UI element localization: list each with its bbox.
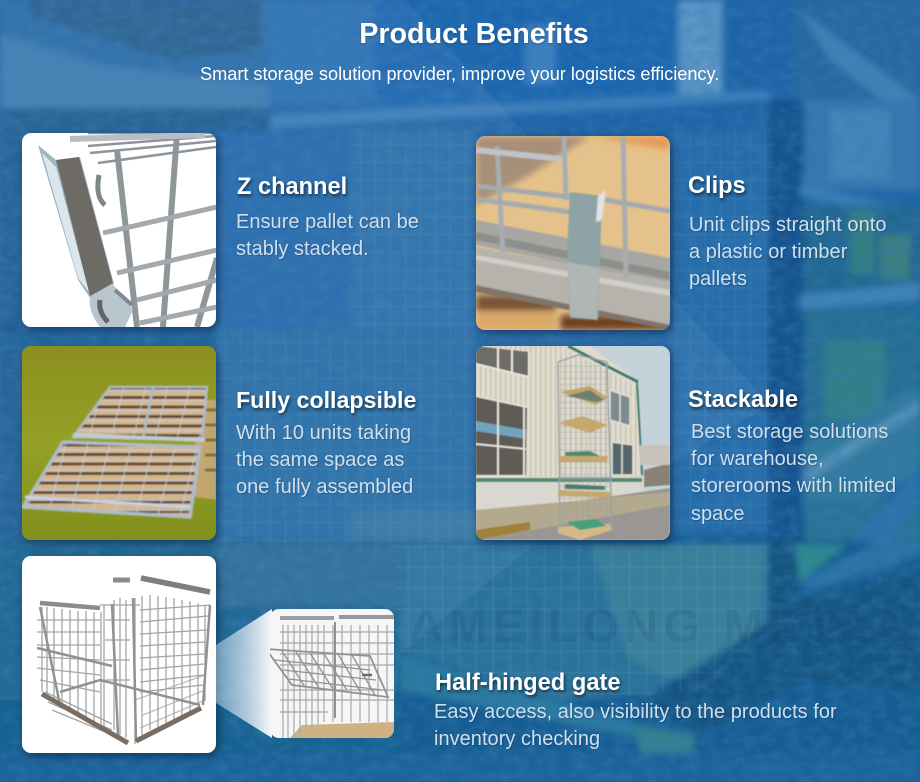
watermark: AMEILONG METAL: [409, 599, 909, 652]
panel: Z channel photo: [22, 133, 216, 327]
heading: Half-hinged gate: Half-hinged gate: [435, 670, 621, 696]
text: Fully collapsible: the same space as: [236, 449, 404, 471]
text: Stackable: storerooms with limited: [691, 475, 896, 497]
text: Clips: [689, 214, 887, 290]
text: Fully collapsible: [236, 422, 413, 498]
title: Product Benefits: [359, 18, 589, 50]
text: Stackable: [691, 421, 896, 525]
text: Z channel: Ensure pallet can be: [236, 211, 419, 233]
panel: gate detail inset: [270, 609, 394, 738]
panel: Clips photo: [476, 136, 670, 330]
text: Fully collapsible: With 10 units taking: [236, 422, 411, 444]
text: Stackable: for warehouse,: [691, 448, 824, 470]
heading: Z channel: Z channel: [237, 174, 347, 200]
text: Z channel: stably stacked.: [236, 238, 369, 260]
text: Stackable: space: [691, 503, 745, 525]
panel: Fully collapsible photo: [22, 346, 216, 540]
heading: Fully collapsible: Fully collapsible: [236, 387, 416, 413]
text: Stackable: Best storage solutions: [691, 421, 888, 443]
text: Half-hinged gate: inventory checking: [434, 728, 600, 750]
text: Half-hinged gate: Easy access, also visibility to the products for: [434, 701, 837, 723]
text: Clips: Unit clips straight onto: [689, 214, 886, 236]
subtitle: Smart storage solution provider, improve your logistics efficiency.: [200, 64, 719, 84]
panel: half-hinged gate photo: [22, 556, 216, 753]
text: Clips: pallets: [689, 268, 747, 290]
text: Z channel: [236, 211, 419, 260]
text: Half-hinged gate: [434, 701, 838, 750]
heading: Stackable: Stackable: [688, 387, 798, 413]
text: Fully collapsible: one fully assembled: [236, 476, 413, 498]
panel: Stackable photo: [476, 346, 670, 540]
heading: Clips: Clips: [688, 173, 746, 199]
text: Clips: a plastic or timber: [689, 241, 847, 263]
